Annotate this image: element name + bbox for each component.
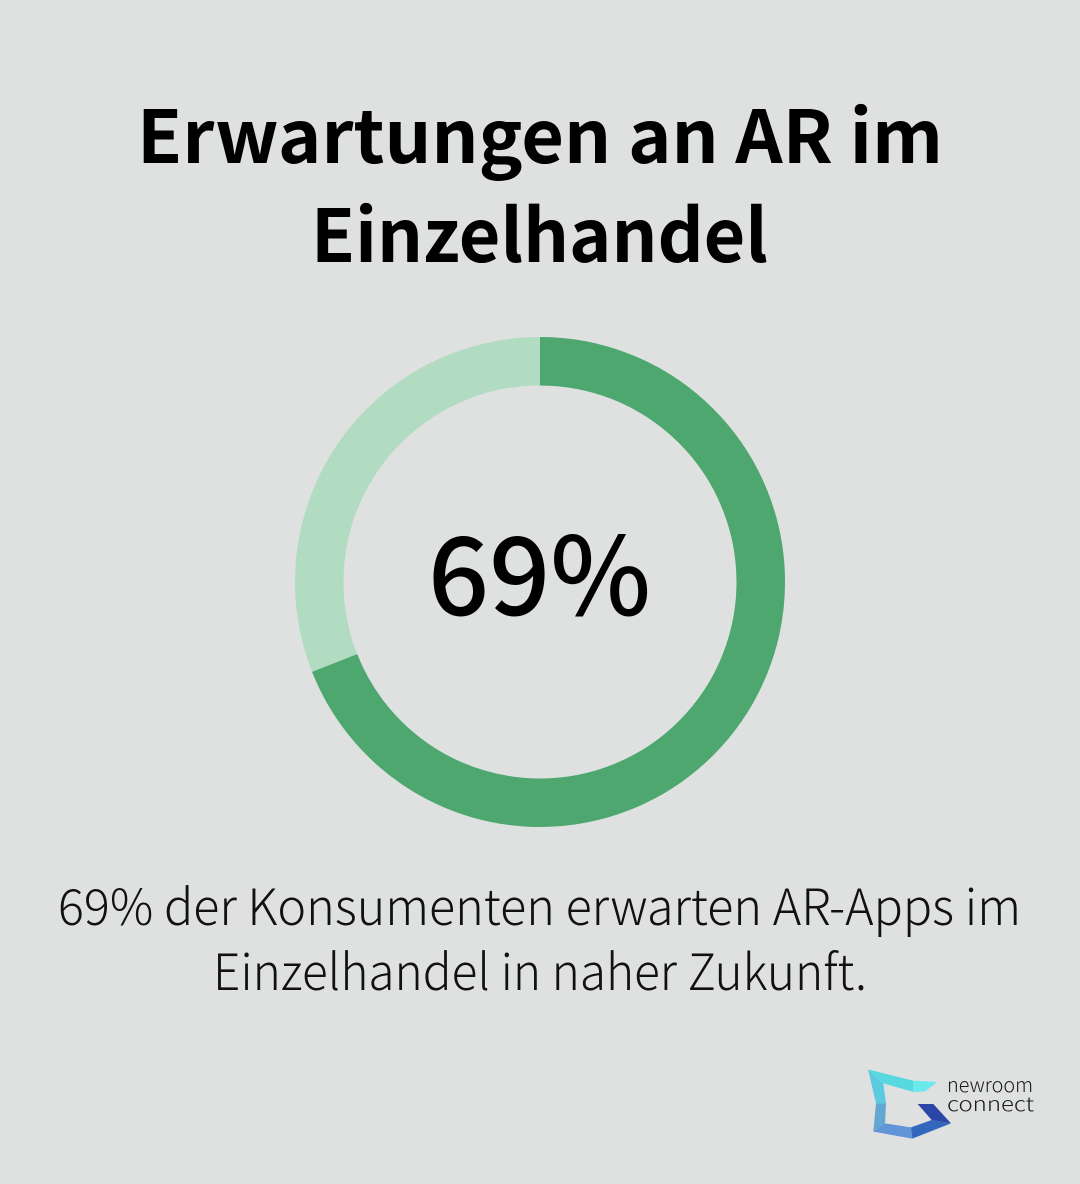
logo wordmark: newroom (947, 1069, 1033, 1098)
description text: Einzelhandel in naher Zukunft. (213, 933, 867, 1005)
icon: logo mark (868, 1069, 951, 1139)
logo wordmark: connect (947, 1088, 1034, 1117)
title (137, 79, 943, 284)
title: Erwartungen an AR im (137, 79, 943, 185)
description text: 69% der Konsumenten erwarten AR-Apps im (58, 868, 1021, 940)
description text (58, 868, 1021, 1005)
donut chart: 69% (319, 361, 761, 803)
title: Einzelhandel (311, 178, 768, 284)
logo wordmark (947, 1069, 1034, 1117)
donut centre value: 69% (428, 491, 651, 647)
logo: newroom connect (868, 1069, 1034, 1139)
